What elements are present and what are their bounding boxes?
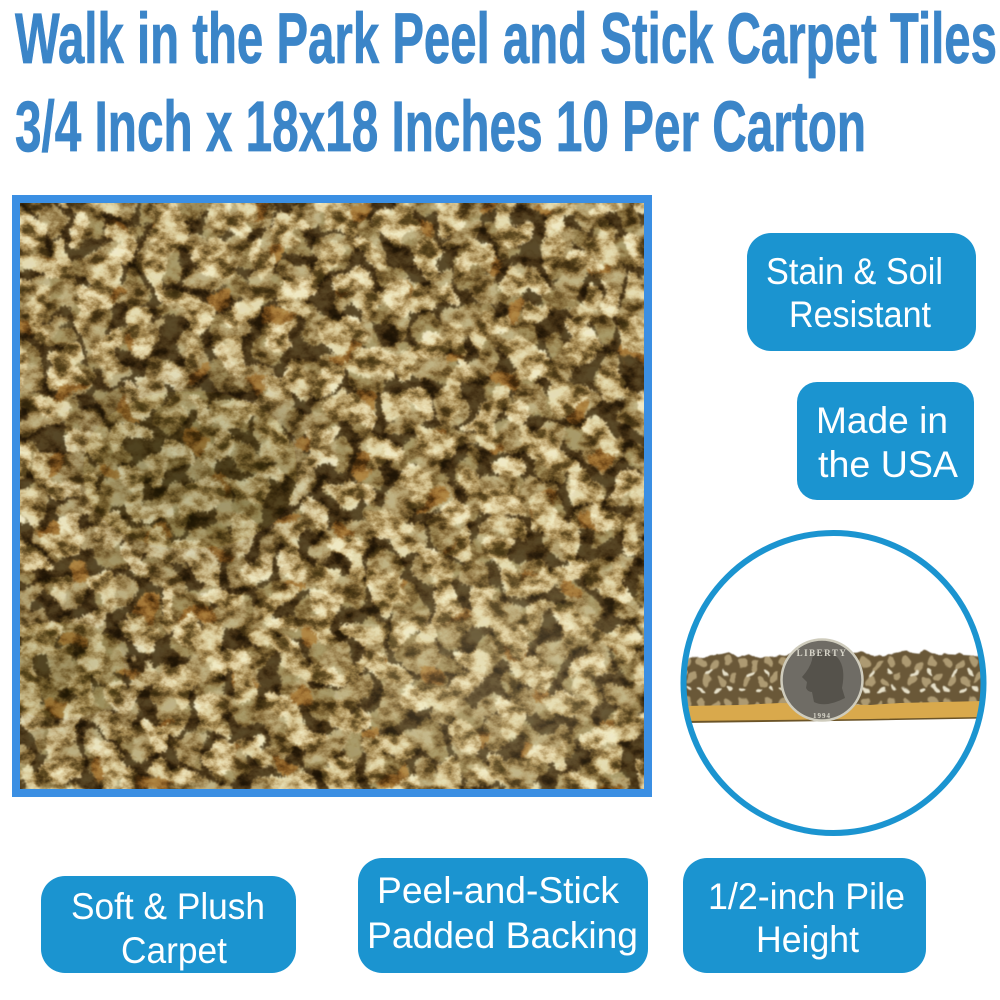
panel: carpet photo with blue frame [12,195,652,797]
circle: carpet cross-section with quarter [684,533,984,833]
badge: peel-and-stick padded backing: Peel-and-Stick [377,870,620,911]
quarter coin [782,640,862,720]
badge: soft and plush carpet: Soft & Plush [71,886,265,927]
badge: soft and plush carpet: Carpet [121,930,228,971]
badge: stain and soil resistant [747,233,976,351]
badge: peel-and-stick padded backing: Padded Backing [367,915,638,956]
badge: made in the USA: Made in [816,400,948,441]
badge: made in the USA [797,382,974,500]
quarter coin: LIBERTY [797,648,847,658]
badge: peel-and-stick padded backing [358,858,648,973]
badge: stain and soil resistant: Stain & Soil [766,251,943,292]
padded backing [684,701,984,722]
badge: soft and plush carpet [41,876,296,973]
badge: half-inch pile height: 1/2-inch Pile [708,876,905,917]
title [15,0,997,167]
badge: made in the USA: the USA [818,444,958,485]
badge: half-inch pile height: Height [756,919,860,960]
quarter coin: 1994 [813,712,831,720]
badge: stain and soil resistant: Resistant [789,294,932,335]
badge: half-inch pile height [683,858,926,973]
carpet pile [684,651,984,708]
